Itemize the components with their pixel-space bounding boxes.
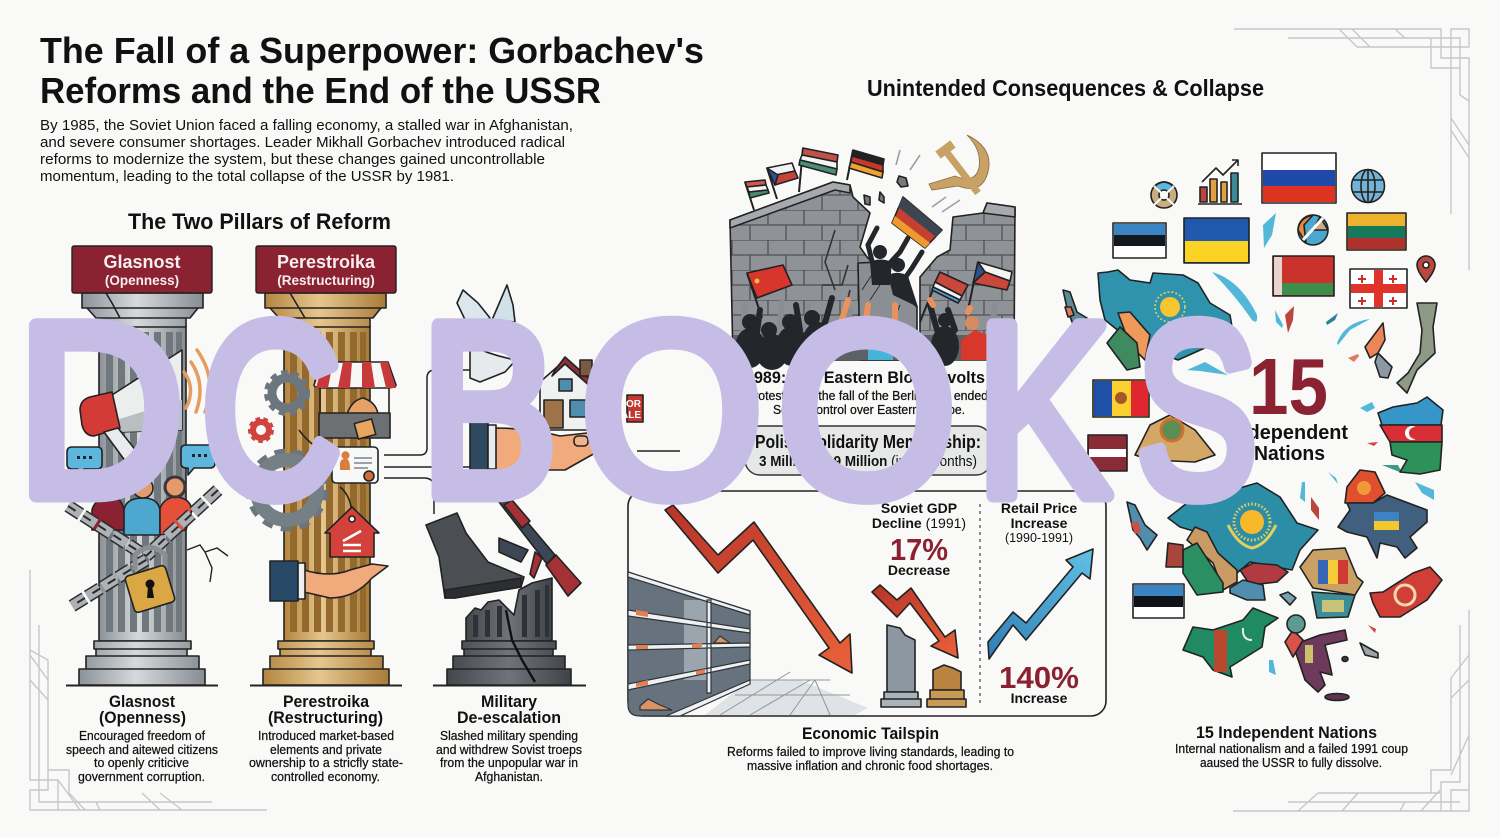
dotted divider [979, 504, 981, 707]
military caption: Afghanistan. [475, 769, 543, 784]
gears [250, 374, 325, 527]
military caption: De-escalation [457, 708, 561, 727]
right flags [920, 262, 1012, 322]
stat: 15: 15 [1249, 342, 1328, 431]
perestroika caption: Introduced market-based [258, 728, 394, 743]
perestroika caption: ownership to a stricfly state- [249, 755, 403, 770]
column: grey [79, 293, 205, 685]
bloc caption: 1989: The Eastern Bloc Revolts [745, 368, 985, 387]
nations caption: 15 Independent Nations [1196, 723, 1377, 742]
solidarity stat pill [745, 426, 991, 475]
glasnost caption [66, 692, 218, 784]
retail stat: 140% [999, 660, 1079, 695]
bloc caption [745, 368, 988, 417]
stat label [1230, 422, 1348, 465]
house tag [325, 487, 379, 557]
floor tiles [705, 672, 868, 715]
retail stat: Increase [1011, 690, 1068, 706]
panel: military de-escalation [426, 285, 643, 784]
glasnost caption: speech and aitewed citizens [66, 742, 218, 757]
watermark: D [17, 272, 184, 548]
flying debris and flag [864, 150, 960, 248]
rifle [499, 497, 581, 596]
red flag [747, 265, 792, 318]
big falling arrow [665, 505, 852, 673]
tailspin caption: Reforms failed to improve living standards, leading to [727, 744, 1014, 759]
tailspin caption [727, 724, 1014, 773]
giving hand [270, 561, 388, 601]
ground line [66, 684, 218, 686]
intro text: reforms to modernize the system, but these changes gained uncontrollable [40, 152, 545, 168]
shards [1187, 213, 1434, 675]
panel: eastern bloc revolts [730, 135, 1015, 475]
perestroika caption: Perestroika [283, 692, 369, 711]
watermark: O [581, 273, 763, 547]
flags [1088, 153, 1407, 618]
watermark: O [778, 273, 956, 548]
military caption: and withdrew Sovist troeps [436, 742, 582, 757]
sound waves [184, 350, 210, 412]
military caption: Slashed military spending [440, 728, 578, 743]
rising arrow [988, 549, 1093, 659]
glasnost caption: to openly criticive [94, 755, 189, 770]
broken column [447, 578, 571, 685]
perestroika caption: controlled economy. [271, 769, 380, 784]
hammer and sickle [929, 135, 989, 193]
military caption [436, 692, 582, 784]
ground line [433, 684, 586, 686]
intro text: By 1985, the Soviet Union faced a falling economy, a stalled war in Afghanistan, [40, 118, 573, 134]
connector lines [384, 370, 680, 514]
gdp stat: Decrease [888, 562, 950, 578]
dove [457, 285, 516, 382]
gdp stat: Soviet GDP [881, 500, 957, 516]
label: perestroika [256, 246, 396, 293]
label: glasnost: Glasnost [103, 252, 181, 272]
military caption: from the unpopular war in [440, 755, 578, 770]
stat label: Nations [1254, 443, 1325, 465]
open hand [470, 422, 604, 472]
glasnost caption: Glasnost [109, 692, 175, 711]
megaphone [80, 350, 182, 462]
bloc caption: Protests and the fall of the Berlin Wall ended [746, 388, 988, 403]
glasnost caption: Encouraged freedom of [79, 728, 205, 743]
pillar: perestroika [249, 293, 403, 784]
title: Reforms and the End of the USSR [40, 70, 601, 111]
solidarity stat pill: 3 Million → 9 Million (in 18 months) [759, 454, 977, 470]
retail stat: Increase [1011, 515, 1068, 531]
icons [1151, 160, 1435, 282]
people [92, 477, 192, 535]
broken columns [881, 625, 966, 707]
small falling arrow [872, 585, 958, 658]
pillar: glasnost [66, 293, 228, 784]
map shapes lower [1127, 470, 1442, 700]
military caption: Military [481, 692, 537, 711]
house with sign: FOR [620, 399, 642, 410]
panel frame [628, 491, 1106, 716]
crowd [733, 298, 1015, 370]
house with sign: SALE [614, 410, 641, 421]
tailspin caption: Economic Tailspin [802, 724, 939, 743]
empty shelves [628, 572, 750, 716]
watermark: C [201, 272, 341, 547]
label: perestroika: Perestroika [277, 252, 376, 272]
nations caption [1175, 723, 1408, 770]
title: The Fall of a Superpower: Gorbachev's [40, 30, 704, 71]
id card [332, 447, 378, 483]
perestroika caption: (Restructuring) [268, 708, 383, 727]
watermark: S [1136, 272, 1257, 547]
title [40, 30, 704, 111]
map shapes upper left [1063, 270, 1232, 462]
panel: fifteen nations [1063, 153, 1443, 770]
heading: two pillars: The Two Pillars of Reform [128, 209, 391, 234]
intro text: momentum, leading to the total collapse of the USSR by 1981. [40, 169, 454, 185]
stat label: Independent [1230, 422, 1348, 444]
label: glasnost: (Openness) [105, 273, 179, 288]
wall illustration [730, 182, 1015, 360]
watermark [17, 272, 1257, 548]
tailspin caption: massive inflation and chronic food shortages. [747, 758, 993, 773]
nations caption: Internal nationalism and a failed 1991 coup [1175, 741, 1408, 756]
column: gold [263, 293, 389, 685]
watermark: B [421, 272, 557, 547]
crack [187, 545, 228, 582]
bloc caption: Soviet control over Eastern Europe. [773, 402, 965, 417]
gdp stat: 17% [890, 532, 948, 567]
watermark: K [976, 272, 1111, 547]
label: glasnost [72, 246, 212, 293]
nations caption: aaused the USSR to fully dissolve. [1200, 755, 1382, 770]
perestroika caption: elements and private [270, 742, 382, 757]
gdp stat: Decline (1991) [872, 515, 966, 531]
ground line [250, 684, 402, 686]
label: perestroika: (Restructuring) [277, 273, 375, 288]
wall flags [745, 148, 884, 210]
intro text [40, 118, 573, 185]
panel: economic tailspin [628, 491, 1106, 773]
intro text: and severe consumer shortages. Leader Mikhall Gorbachev introduced radical [40, 135, 565, 151]
glasnost caption: government corruption. [78, 769, 205, 784]
glasnost caption: (Openness) [99, 708, 186, 727]
gdp stat [872, 500, 966, 578]
retail stat: (1990-1991) [1005, 531, 1073, 545]
heading: consequences: Unintended Consequences & Collapse [867, 75, 1264, 101]
retail stat [999, 500, 1079, 706]
solidarity stat pill: Polish Solidarity Membership: [755, 432, 981, 452]
chains and padlock [68, 490, 218, 613]
rubble and breach people [858, 228, 922, 360]
perestroika caption [249, 692, 403, 784]
boot [426, 513, 524, 598]
speech bubbles [67, 445, 215, 475]
retail stat: Retail Price [1001, 500, 1077, 516]
market stall [314, 362, 396, 439]
house with sign [540, 357, 643, 430]
map shapes upper right [1365, 303, 1443, 474]
